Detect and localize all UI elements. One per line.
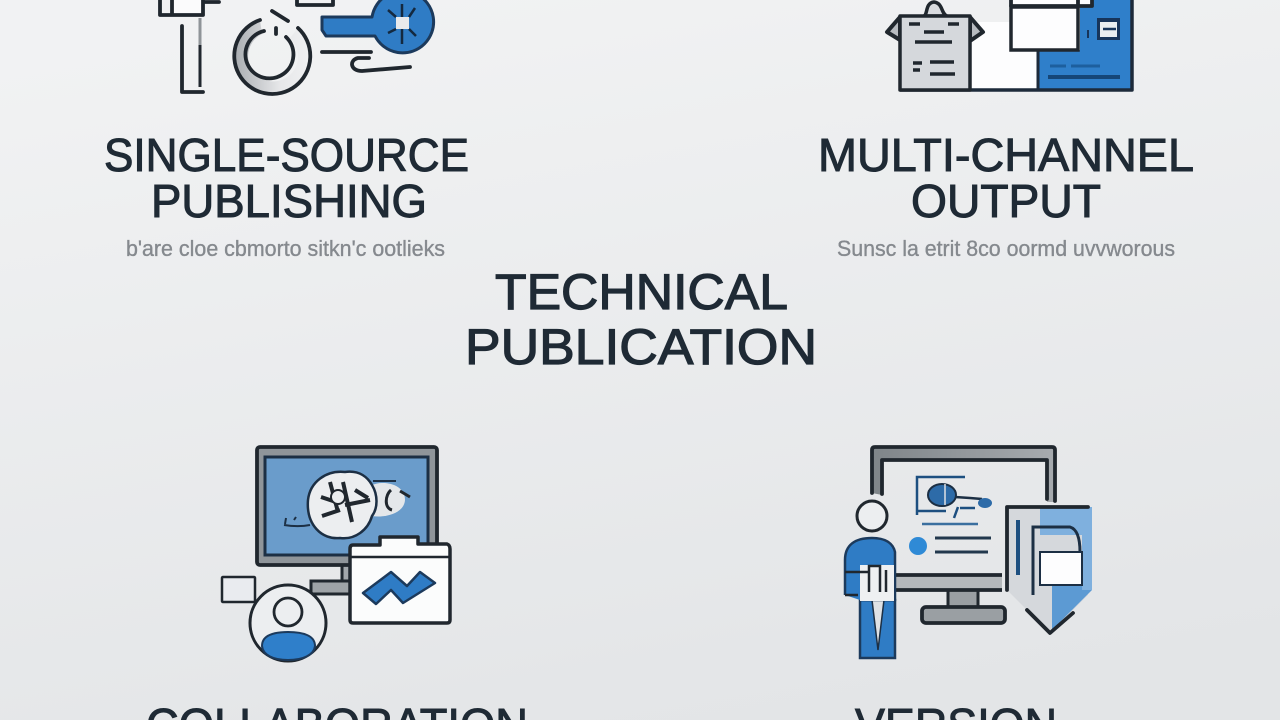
- description: single-source publishing: b'are cloe cbmorto sitkn'c ootlieks: [126, 236, 445, 261]
- icon: clipboard, page and blue document: [887, 0, 1132, 90]
- panel: multi-channel output: [818, 0, 1194, 261]
- central title: [465, 264, 817, 375]
- panel: version control: [845, 447, 1092, 720]
- panel: single-source publishing: [104, 0, 469, 261]
- heading: single-source publishing: [104, 129, 469, 227]
- heading: multi-channel output: OUTPUT: [911, 175, 1101, 227]
- icon: source document, loop and key: [160, 0, 434, 94]
- icon: presenter, monitor and shield: [845, 447, 1092, 658]
- central title: TECHNICAL: [495, 264, 788, 320]
- heading: multi-channel output: [818, 129, 1194, 227]
- central title: PUBLICATION: [465, 319, 817, 375]
- icon: monitor, folder and user: [222, 447, 450, 661]
- description: multi-channel output: Sunsc la etrit 8co oormd uvvworous: [837, 236, 1175, 261]
- panel: collaboration: [146, 447, 528, 720]
- heading: single-source publishing: SINGLE-SOURCE: [104, 129, 469, 181]
- heading: single-source publishing: PUBLISHING: [151, 175, 427, 227]
- heading: multi-channel output: MULTI-CHANNEL: [818, 129, 1194, 181]
